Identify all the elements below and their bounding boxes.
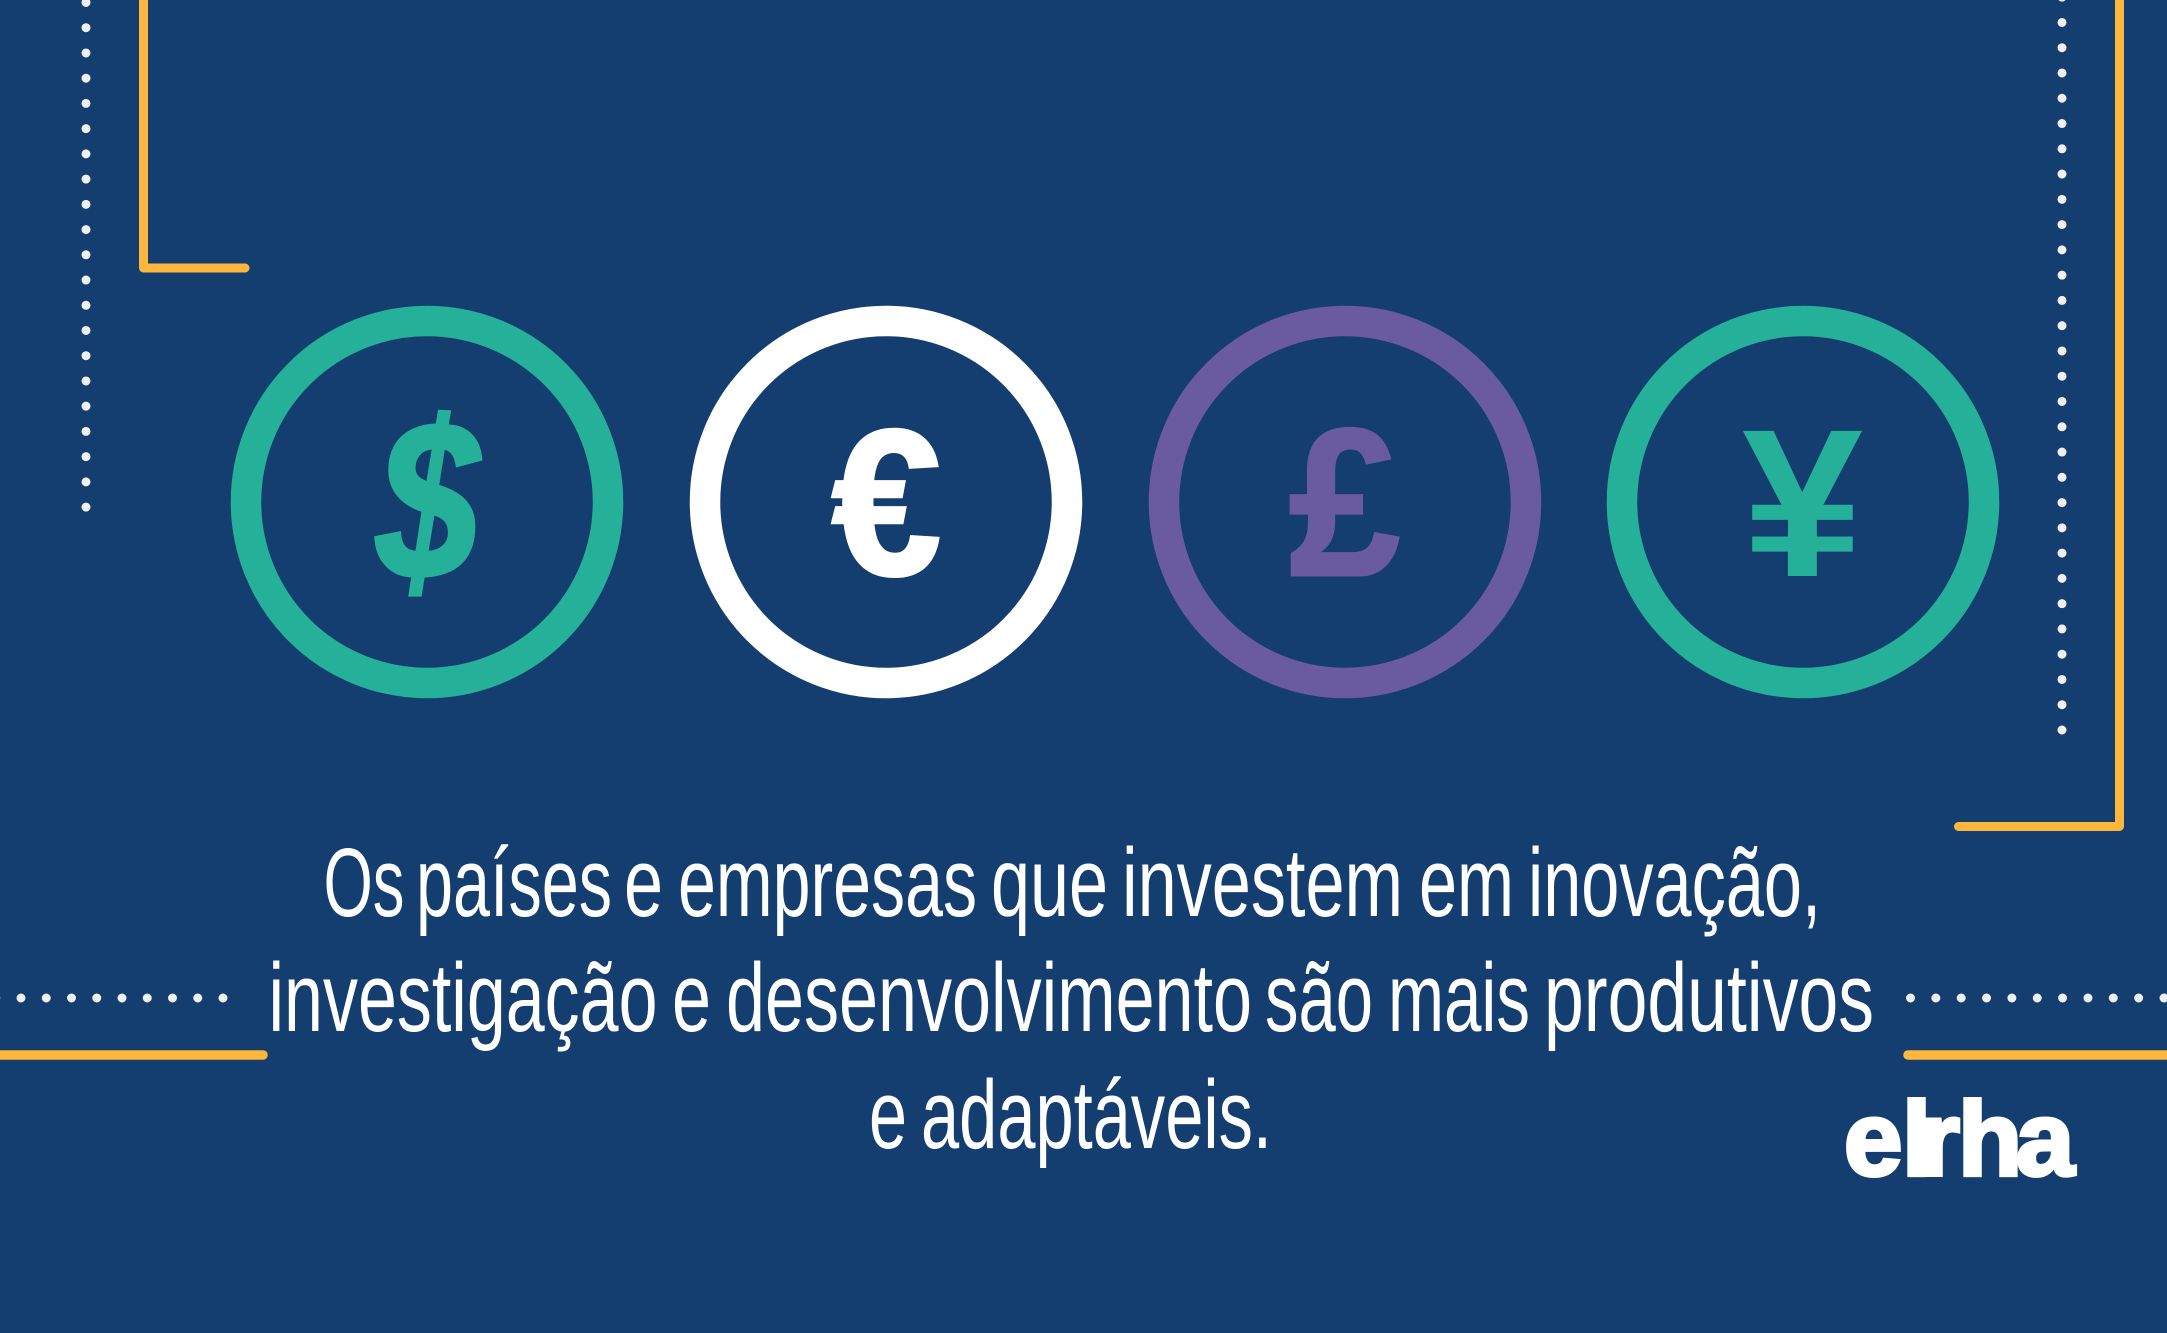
yellow line: left	[0, 1050, 263, 1060]
statement text: que	[991, 828, 1108, 937]
dotted line: left horizontal	[0, 994, 223, 1002]
statement text: são	[1265, 943, 1373, 1052]
statement text: investigação	[268, 943, 658, 1052]
statement text: em	[1419, 828, 1514, 937]
dotted line: top right vertical	[2058, 0, 2066, 730]
statement text: mais	[1388, 943, 1530, 1052]
icon: euro coin: €	[832, 388, 942, 620]
statement text: e	[672, 943, 711, 1052]
statement text: e	[624, 828, 663, 937]
dotted line: top left vertical	[82, 2, 90, 510]
icon: pound coin	[1164, 321, 1526, 683]
statement text: e	[869, 1060, 907, 1169]
yellow bracket: right	[1958, 0, 2120, 826]
icon: dollar coin: $	[375, 376, 481, 626]
dotted line: right horizontal	[1910, 994, 2167, 1002]
icon: euro coin	[705, 321, 1067, 683]
icon: yen coin	[1622, 321, 1984, 683]
statement text: inovação,	[1528, 828, 1821, 937]
yellow bracket: top left	[144, 0, 245, 268]
statement text: desenvolvimento	[726, 943, 1252, 1052]
yellow line: right	[1908, 1050, 2167, 1060]
statement text: empresas	[678, 828, 977, 937]
logo: elrha: elrha	[1844, 1081, 2076, 1198]
statement text: adaptáveis.	[921, 1060, 1272, 1169]
statement text: produtivos	[1544, 943, 1874, 1052]
statement text: Os	[324, 828, 404, 937]
statement text: países	[416, 828, 612, 937]
icon: pound coin: £	[1289, 385, 1400, 620]
icon: dollar coin	[246, 321, 608, 683]
statement text	[268, 828, 1874, 1169]
icon: yen coin: ¥	[1742, 385, 1863, 621]
statement text: investem	[1122, 828, 1403, 937]
